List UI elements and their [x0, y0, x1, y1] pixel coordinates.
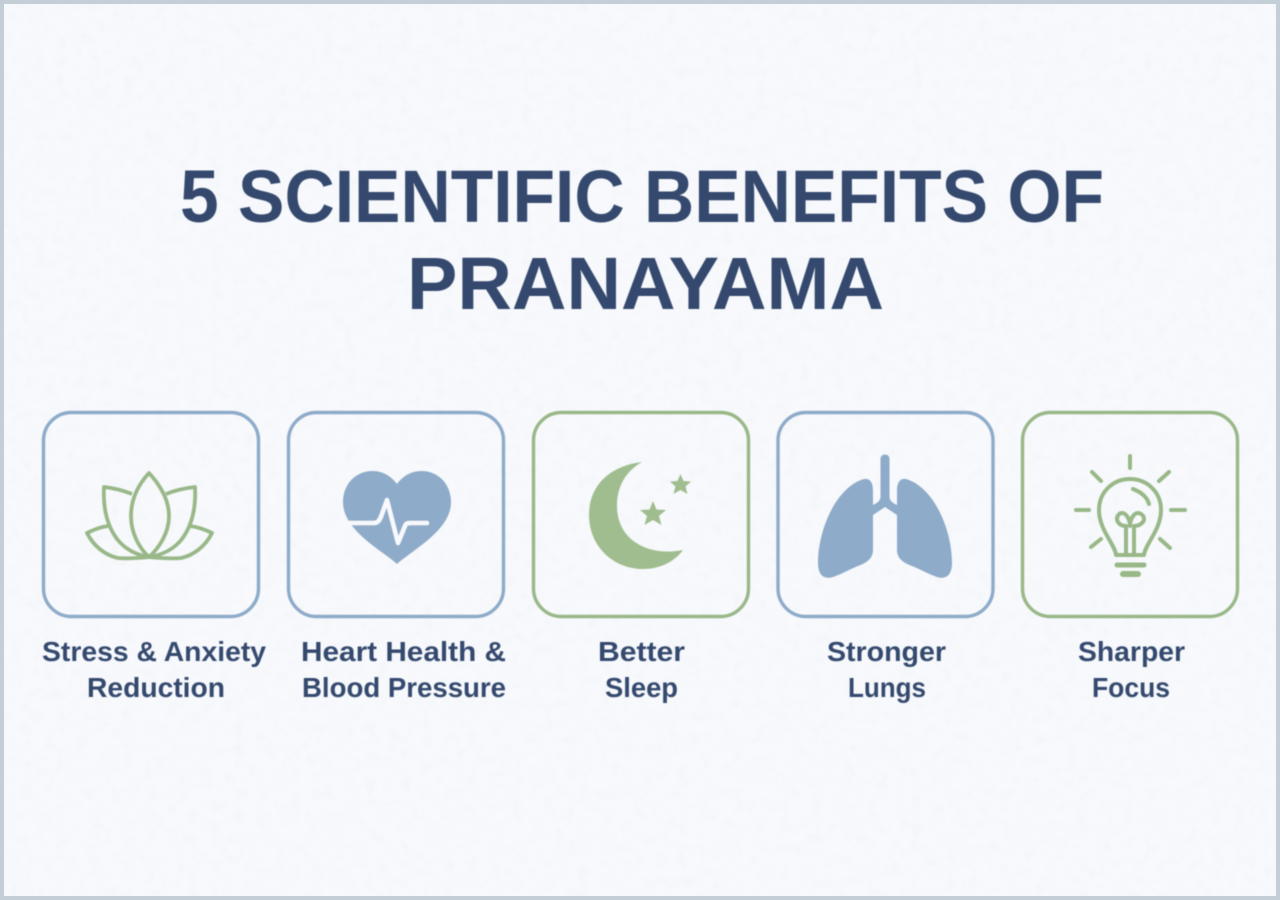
label: stress and anxiety reduction: Reduction — [87, 672, 225, 703]
label: sharper focus — [1078, 636, 1185, 703]
card outline: focus — [1022, 412, 1238, 616]
title: PRANAYAMA — [407, 242, 884, 325]
label: heart health and blood pressure: Blood Pressure — [302, 672, 506, 703]
label: stronger lungs — [827, 636, 946, 703]
label: better sleep — [598, 636, 685, 703]
card outline: heart — [288, 412, 504, 616]
panel: stronger lungs — [778, 412, 993, 703]
icon: light bulb — [1076, 456, 1185, 574]
label: better sleep: Better — [598, 636, 685, 667]
label: sharper focus: Focus — [1092, 672, 1170, 703]
label: stronger lungs: Stronger — [827, 636, 946, 667]
card outline: stress — [44, 412, 258, 616]
card outline: lungs — [778, 412, 993, 616]
label: stronger lungs: Lungs — [848, 672, 926, 703]
label: stress and anxiety reduction — [42, 636, 267, 703]
title: 5 SCIENTIFIC BENEFITS OF — [180, 155, 1104, 238]
card outline: sleep — [534, 412, 748, 616]
label: heart health and blood pressure — [301, 636, 506, 703]
title — [180, 155, 1104, 325]
panel: heart health and blood pressure — [288, 412, 506, 703]
icon: heart with pulse — [340, 471, 451, 564]
panel: sharper focus — [1022, 412, 1238, 703]
label: sharper focus: Sharper — [1078, 636, 1185, 667]
icon: moon and stars — [589, 462, 691, 569]
icon: lotus — [87, 473, 212, 558]
label: heart health and blood pressure: Heart Health & — [301, 636, 506, 667]
panel: stress and anxiety reduction — [42, 412, 267, 703]
label: better sleep: Sleep — [605, 672, 678, 703]
panel: better sleep — [534, 412, 748, 703]
label: stress and anxiety reduction: Stress & Anxiety — [42, 636, 267, 667]
icon: lungs — [818, 454, 952, 578]
